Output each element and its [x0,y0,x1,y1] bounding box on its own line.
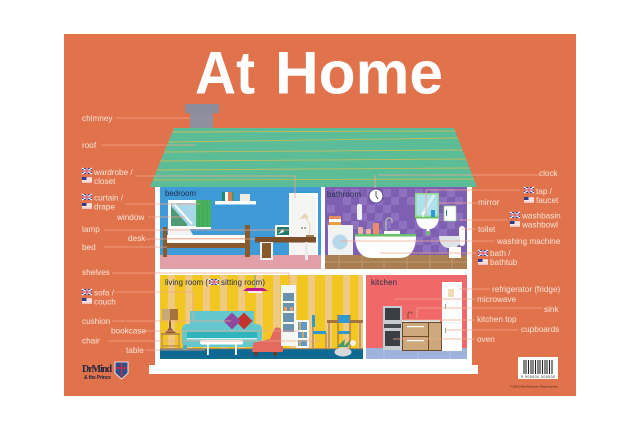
label: sofa / couch: sofa / [94,288,115,298]
cupboards [402,320,442,351]
label: refrigerator (fridge): refrigerator (fridge) [492,285,561,294]
side table and table lamp [161,309,180,349]
bathtub [355,218,416,258]
shelf with books [215,192,256,204]
logo [82,362,128,381]
bedroom heading: bedroom [165,189,196,198]
label: microwave: microwave [477,295,517,304]
label: sofa / couch: couch [94,298,116,306]
labels right [477,169,561,344]
plant [334,339,356,356]
label: chimney: chimney [82,114,113,123]
label: sink: sink [544,305,559,314]
title: Home [275,40,443,106]
living room heading [165,278,265,287]
label: tap / faucet [524,187,559,205]
shower gel and bottles [357,204,379,234]
label: wardrobe / closet [82,168,133,186]
label: washbasin / washbowl: washbowl [521,220,558,230]
label: clock: clock [539,169,559,178]
washbasin [415,210,439,235]
living room heading: living room ( [165,278,208,287]
label: bath / bathtub: bath / [490,249,511,258]
house walls [149,187,478,374]
title [195,40,443,106]
label: washbasin / washbowl: washbasin [521,212,561,220]
toilet [439,226,465,258]
wardrobe [289,193,318,255]
laptop [275,225,291,237]
label: chair: chair [82,336,100,346]
label: bath / bathtub [478,249,518,267]
label: bed: bed [82,243,96,252]
coffee table [200,340,243,355]
window and curtain [168,200,211,229]
bed [163,225,250,257]
panel: living room [160,275,363,359]
sink tap [408,312,412,319]
towels [329,216,341,225]
logo: & the Prince [84,375,111,381]
panel: kitchen [366,275,467,359]
connector lines [101,118,542,350]
mirror [415,193,439,217]
refrigerator [442,282,462,351]
label: tap / faucet: tap / [536,187,553,196]
labels left [82,114,146,355]
label: lamp: lamp [82,225,100,234]
barcode: 5 000000 000000 [521,375,555,379]
title: At [195,40,255,106]
label: washing machine: washing machine [496,237,561,246]
washing machine [328,225,353,255]
label: curtain / drape: drape [94,202,115,212]
label: sofa / couch [82,288,116,306]
panel: bedroom [160,187,321,269]
barcode [518,357,558,379]
label: mirror: mirror [478,198,500,207]
label: washbasin / washbowl [510,212,561,230]
panel: bathroom [325,187,467,269]
desk [255,237,316,260]
logo: DrMind [82,364,112,375]
icon: chimney [185,104,219,128]
label: desk: desk [128,234,146,243]
label: wardrobe / closet: wardrobe / [93,168,133,177]
label: kitchen top: kitchen top [477,315,517,324]
copyright: © 2018 Dr Mind Resources. All rights reserved. [510,384,558,388]
label: cupboards: cupboards [521,325,559,334]
label: table: table [126,346,144,355]
label: wardrobe / closet: closet [94,177,116,186]
living room heading: sitting room) [221,278,265,287]
label: toilet: toilet [478,225,496,234]
oven [383,322,402,350]
clock [369,189,383,203]
bookcase [281,285,309,348]
label: bookcase: bookcase [111,326,146,336]
sofa [182,311,262,350]
kitchen heading: kitchen [371,278,397,287]
label: oven: oven [477,335,495,344]
label: shelves: shelves [82,268,110,277]
cabinet [444,206,456,221]
microwave [383,306,402,322]
label: curtain / drape [82,194,124,212]
bathroom heading: bathroom [327,190,361,199]
label: window: window [116,213,144,222]
label: cushion: cushion [82,317,111,326]
armchair [252,327,283,356]
poster background [64,34,576,396]
label: curtain / drape: curtain / [94,194,124,202]
lamp [299,213,314,237]
cushions [224,313,252,329]
ceiling lamp [243,275,268,293]
roof [150,128,477,187]
dining chairs and table [312,315,363,349]
label: roof: roof [82,141,97,150]
label: bath / bathtub: bathtub [490,258,518,267]
label: tap / faucet: faucet [536,196,559,205]
